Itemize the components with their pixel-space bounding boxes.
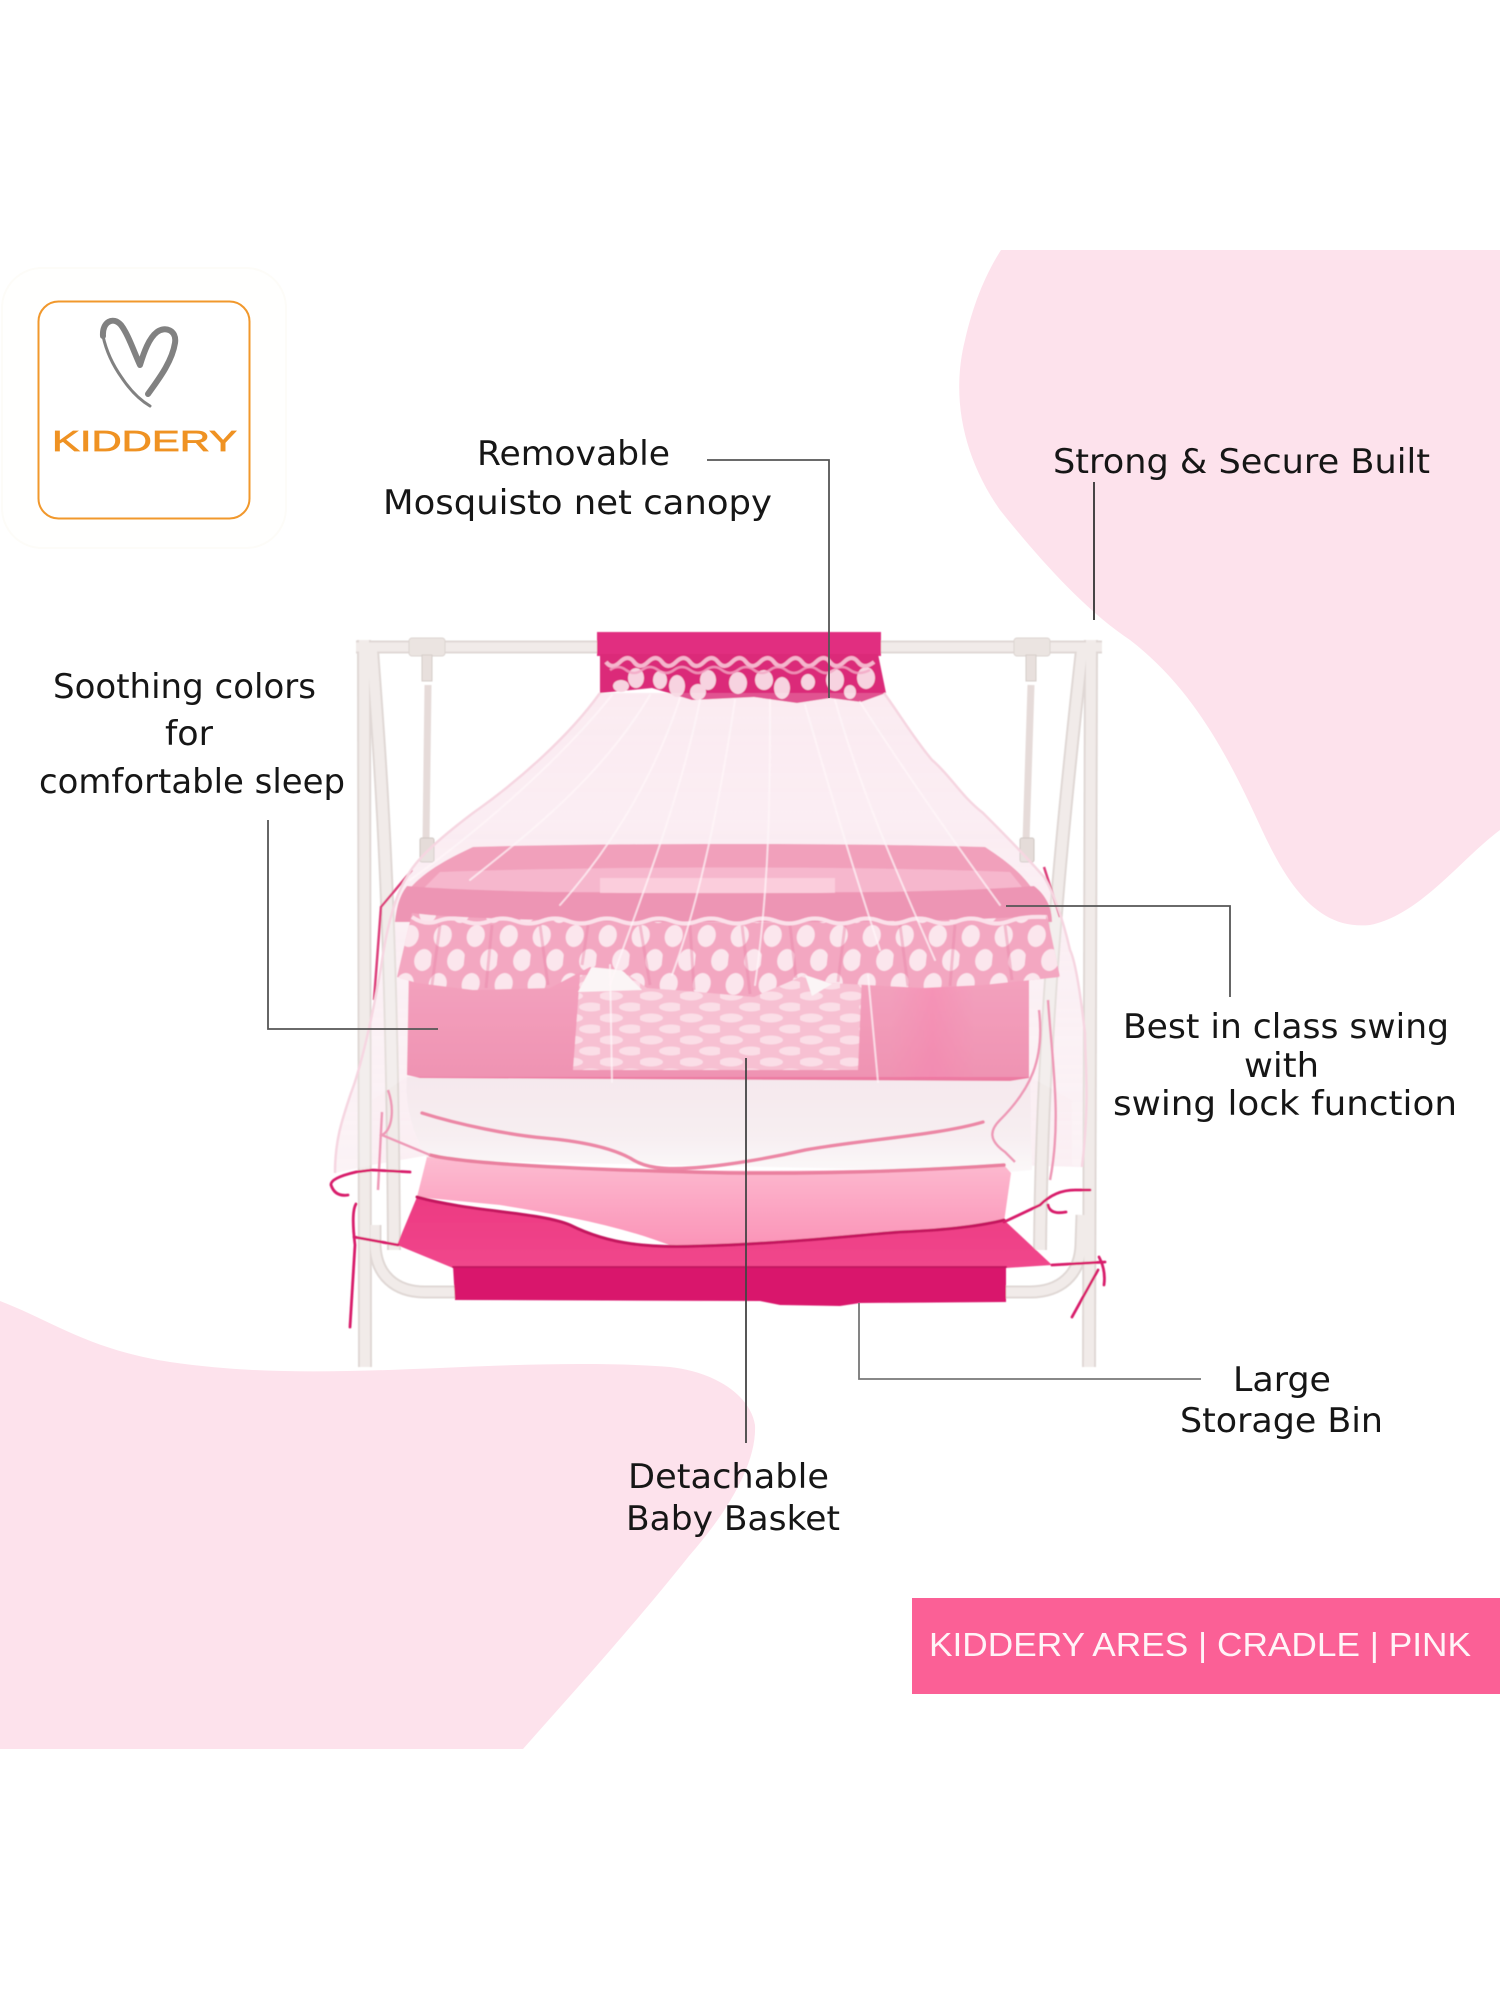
dotted basket ruffle [397, 913, 1060, 997]
callout: best in class swing: swing lock function [1113, 1084, 1457, 1124]
product name banner: KIDDERY ARES | CRADLE | PINK [929, 1626, 1471, 1663]
callout: large storage bin: Storage Bin [1180, 1401, 1383, 1441]
leader: strong and secure built [1093, 482, 1095, 620]
callout: large storage bin [1180, 1360, 1383, 1441]
callout lines [268, 460, 1230, 1443]
leader: soothing colors [268, 820, 438, 1029]
logo: Kiddery badge [2, 268, 286, 548]
callout: removable mosquito net canopy: Removable [477, 434, 670, 474]
logo frame [38, 302, 250, 518]
callout: detachable baby basket: Detachable [628, 1457, 829, 1497]
basket body [407, 965, 1029, 1081]
storage bin front [453, 1266, 1006, 1306]
frame fill strokes [356, 640, 1102, 1367]
light pink hammock bed [417, 1157, 1011, 1248]
mosquito net front veil [335, 693, 1087, 1190]
basket inner bolster [600, 878, 835, 893]
net fold lines [410, 695, 1000, 1082]
leader: storage bin [859, 1303, 1201, 1379]
callout: soothing colors: comfortable sleep [39, 762, 345, 802]
callout: removable mosquito net canopy: Mosquisto net canopy [383, 483, 772, 523]
callout: best in class swing [1113, 1007, 1457, 1124]
side straps behind net [374, 867, 1060, 1000]
logo wordmark: KIDDERY [52, 426, 237, 458]
canopy header band [597, 632, 881, 656]
basket well [405, 844, 1036, 895]
swing clamps and straps [409, 638, 1050, 862]
logo heart icon [103, 321, 175, 406]
callout: removable mosquito net canopy [383, 434, 772, 523]
side net pink seams [378, 1000, 1056, 1190]
leader: detachable basket [745, 1058, 747, 1443]
steel frame [356, 640, 1102, 1367]
ruffle fold shading [432, 925, 1012, 994]
product name banner [912, 1598, 1500, 1694]
back net fill [335, 693, 1087, 1173]
leader: best in class swing [1006, 906, 1230, 997]
basket rim [395, 886, 1052, 922]
leader: mosquito net canopy [707, 460, 829, 698]
callout: soothing colors: for [165, 714, 213, 754]
callout: detachable baby basket: Baby Basket [626, 1499, 840, 1539]
callout: strong and secure built: Strong & Secure Built [1053, 442, 1430, 482]
product illustration: pink cradle [331, 632, 1105, 1367]
basket inner lining [420, 868, 1026, 892]
basket right panel highlight [890, 985, 975, 1078]
callout: detachable baby basket [626, 1457, 840, 1539]
dotted canopy ruffle [600, 654, 886, 703]
canopy dots [613, 667, 875, 700]
callout: large storage bin: Large [1233, 1360, 1331, 1400]
callout: best in class swing: Best in class swing [1123, 1007, 1449, 1047]
frame shadow strokes [356, 640, 1102, 1367]
dark pink hammock sling [397, 1197, 1052, 1268]
background blob: bottom left [0, 1301, 755, 1749]
trim lines on bed and net [417, 1113, 1006, 1267]
basket mesh window [573, 966, 862, 1070]
callout: soothing colors [39, 667, 345, 802]
callout: best in class swing: with [1244, 1046, 1319, 1086]
lower net area [407, 1077, 1032, 1172]
tie ribbons [331, 1170, 1105, 1327]
net outline [335, 693, 1087, 1173]
background blob: top right [959, 250, 1500, 925]
callout: soothing colors: Soothing colors [53, 667, 316, 707]
